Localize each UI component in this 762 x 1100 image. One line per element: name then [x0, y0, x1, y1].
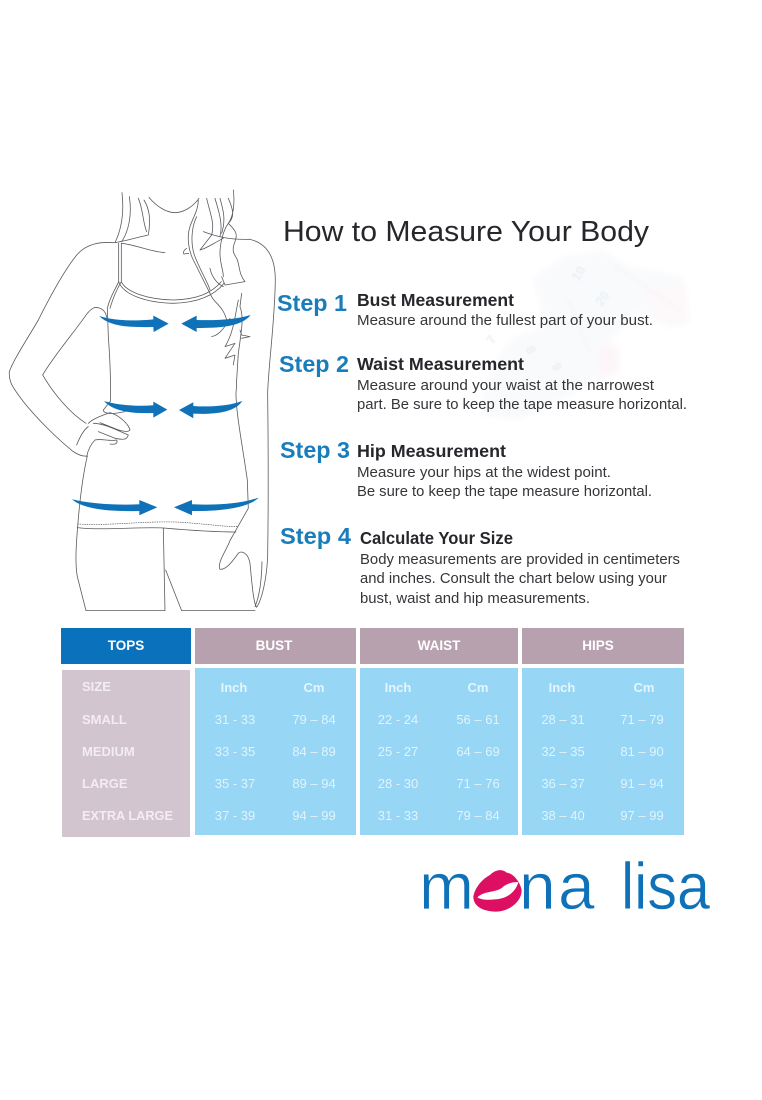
- hair right: [188, 190, 250, 380]
- column: size labels: SMALL: [82, 712, 127, 727]
- figure: woman outline: [9, 190, 275, 611]
- step 4: Body measurements are provided in centimeters: [360, 552, 680, 568]
- watermark: tape measure: 9: [549, 360, 565, 374]
- column: hips values: 36 – 37: [541, 776, 585, 791]
- arrow: bust left: [99, 316, 169, 332]
- header: hips: HIPS: [582, 638, 614, 653]
- column: bust values: 35 - 37: [215, 776, 255, 791]
- header: bust: [195, 628, 356, 664]
- column: waist values: 28 - 30: [378, 776, 418, 791]
- watermark: tape measure: [480, 250, 690, 420]
- column: hips values: 71 – 79: [620, 712, 664, 727]
- column: size labels: MEDIUM: [82, 744, 135, 759]
- arrow: hip left: [72, 499, 157, 515]
- torso left side and straps: [78, 243, 121, 527]
- column: hips values: 81 – 90: [620, 744, 664, 759]
- column: hips values: 38 – 40: [541, 808, 585, 823]
- legs: [76, 527, 255, 611]
- column: waist values: 71 – 76: [456, 776, 500, 791]
- column: size labels: [62, 670, 190, 837]
- column: bust values: Inch: [221, 680, 247, 695]
- step 3: [280, 437, 652, 500]
- logo: mona lisa: [419, 849, 710, 923]
- header: hips: [522, 628, 684, 664]
- column: waist values: Inch: [385, 680, 411, 695]
- watermark: tape measure: 20: [592, 288, 613, 309]
- step 4: bust, waist and hip measurements.: [360, 591, 590, 607]
- step 2: Step 2: [279, 351, 349, 377]
- column: waist values: Cm: [468, 680, 488, 695]
- arrow: bust right: [181, 315, 251, 332]
- step 1: Step 1: [277, 290, 347, 316]
- step 4: and inches. Consult the chart below using your: [360, 571, 667, 587]
- watermark: tape measure: 10: [568, 263, 589, 284]
- column: hips values: Cm: [634, 680, 654, 695]
- arrow: waist left: [104, 401, 167, 418]
- arrows: measurement points: [72, 315, 259, 515]
- icon: lips: [473, 870, 522, 912]
- column: bust values: 31 - 33: [215, 712, 255, 727]
- column: waist values: 22 - 24: [378, 712, 418, 727]
- header: bust: BUST: [256, 638, 293, 653]
- column: size labels: LARGE: [82, 776, 128, 791]
- column: bust values: 94 – 99: [292, 808, 336, 823]
- column: hips values: 32 – 35: [541, 744, 585, 759]
- step 2: Measure around your waist at the narrowest: [357, 378, 654, 394]
- hand on hip: [77, 402, 130, 457]
- step 2: part. Be sure to keep the tape measure horizontal.: [357, 397, 687, 413]
- hair left: [115, 193, 150, 243]
- column: hips values: Inch: [549, 680, 575, 695]
- header: tops: [61, 628, 191, 664]
- step 3: Hip Measurement: [357, 441, 506, 461]
- left arm: [9, 242, 115, 456]
- step 4: [280, 523, 680, 607]
- size chart table: [61, 628, 684, 837]
- neck and collar: [122, 197, 199, 254]
- column: waist values: 31 - 33: [378, 808, 418, 823]
- inner arm: [43, 307, 107, 423]
- arrow: hip right: [174, 498, 259, 515]
- column: hips values: 97 – 99: [620, 808, 664, 823]
- logo: mona lisa: mona: [419, 849, 595, 923]
- column: waist values: 64 – 69: [456, 744, 500, 759]
- hem: [77, 528, 236, 532]
- neckline: [119, 282, 224, 303]
- column: waist values: 79 – 84: [456, 808, 500, 823]
- step 4: Step 4: [280, 523, 351, 549]
- header: waist: [360, 628, 518, 664]
- column: waist values: [360, 668, 518, 835]
- arrow: waist right: [179, 401, 242, 418]
- column: hips values: 28 – 31: [541, 712, 585, 727]
- column: size labels: EXTRA LARGE: [82, 808, 173, 823]
- column: waist values: 56 – 61: [456, 712, 500, 727]
- column: bust values: 89 – 94: [292, 776, 336, 791]
- step 3: Step 3: [280, 437, 350, 463]
- column: hips values: [522, 668, 684, 835]
- column: bust values: 84 – 89: [292, 744, 336, 759]
- header: waist: WAIST: [418, 638, 461, 653]
- watermark: tape measure: 7: [483, 332, 500, 347]
- step 2: Waist Measurement: [357, 354, 524, 374]
- column: bust values: 79 – 84: [292, 712, 336, 727]
- column: bust values: Cm: [304, 680, 324, 695]
- column: bust values: [195, 668, 356, 835]
- header: tops: TOPS: [108, 638, 144, 653]
- column: bust values: 33 - 35: [215, 744, 255, 759]
- step 3: Measure your hips at the widest point.: [357, 465, 611, 481]
- column: waist values: 25 - 27: [378, 744, 418, 759]
- watermark: tape measure: 8: [523, 343, 539, 357]
- logo: mona lisa: lisa: [621, 849, 710, 923]
- title: How to Measure Your Body: [283, 216, 650, 248]
- right shoulder and arm: [203, 232, 275, 607]
- column: bust values: 37 - 39: [215, 808, 255, 823]
- step 1: Measure around the fullest part of your bust.: [357, 313, 653, 329]
- step 3: Be sure to keep the tape measure horizontal.: [357, 484, 652, 500]
- step 4: Calculate Your Size: [360, 528, 513, 548]
- step 2: [279, 351, 687, 413]
- step 1: [277, 290, 653, 329]
- column: hips values: 91 – 94: [620, 776, 664, 791]
- step 1: Bust Measurement: [357, 290, 514, 310]
- column: size labels: SIZE: [82, 679, 111, 694]
